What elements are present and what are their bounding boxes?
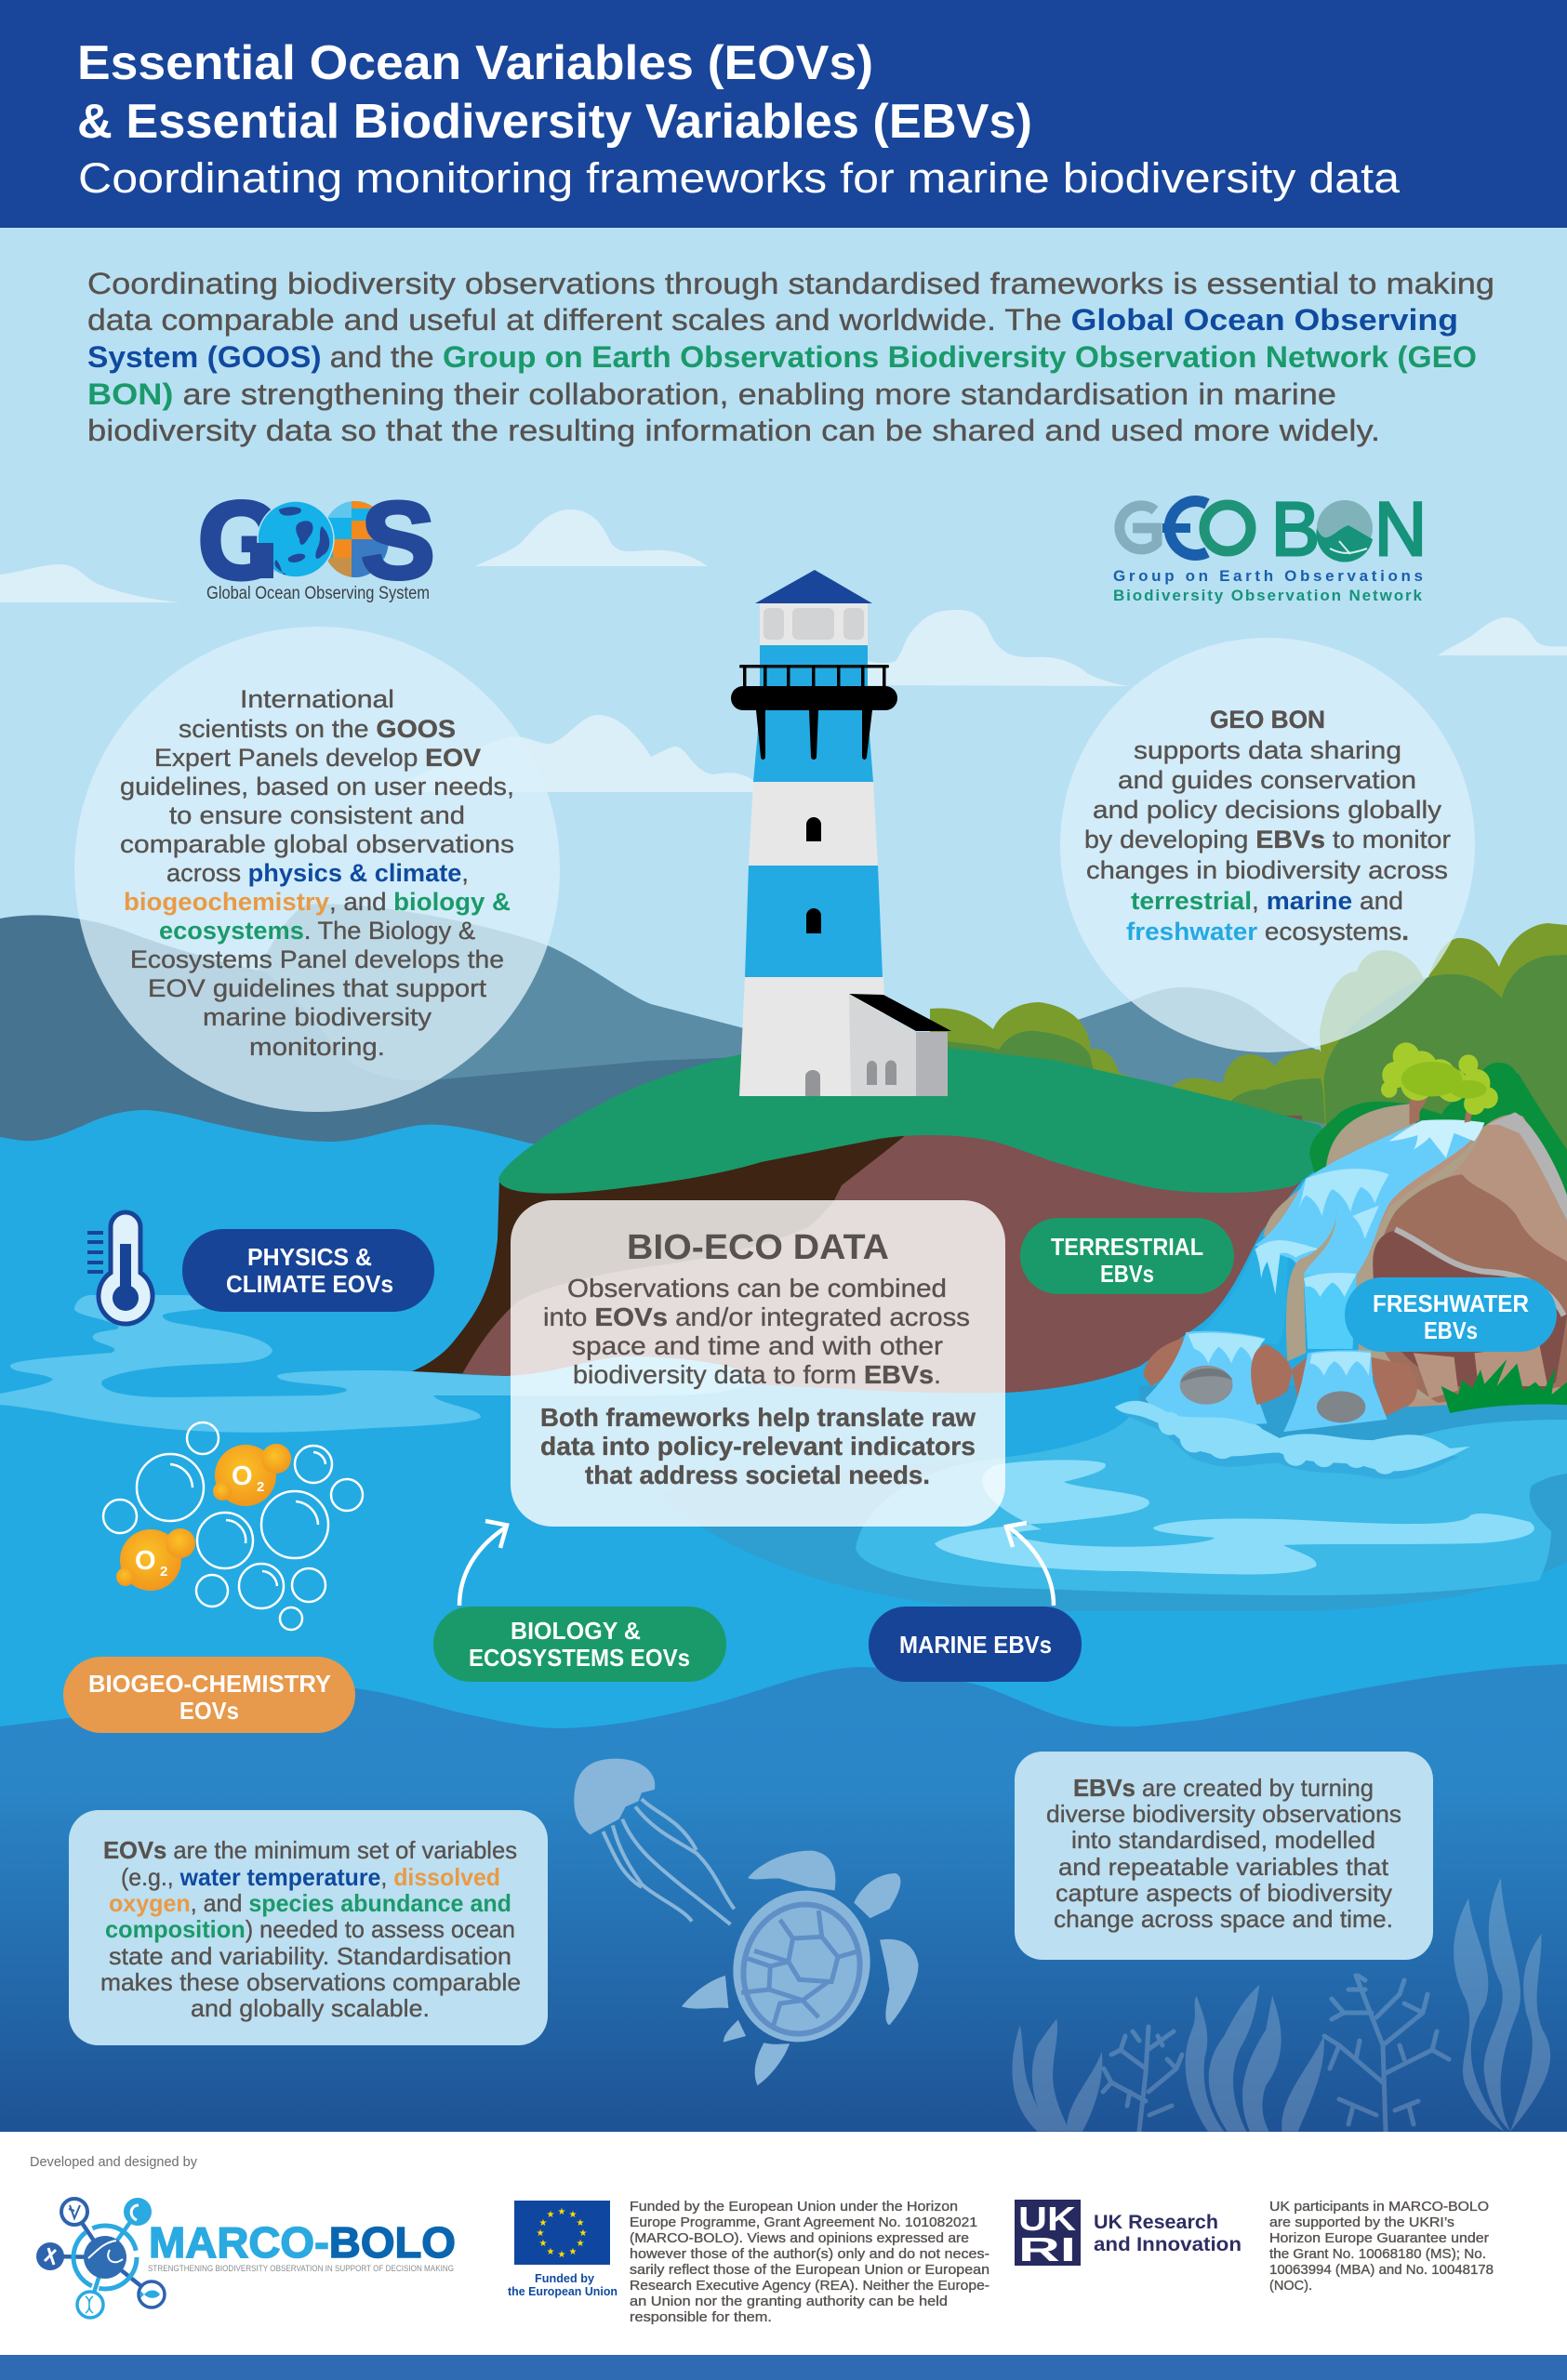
ocean patch right of box (1007, 1367, 1139, 1457)
logo: UK Research and Innovation: and Innovation (1094, 2234, 1242, 2255)
pill: biogeochemistry EOVs (63, 1657, 355, 1733)
UK funding statement: the Grant No. 10068180 (MS); No. (1269, 2246, 1486, 2262)
funding statement: (MARCO-BOLO). Views and opinions expressed are (630, 2230, 969, 2246)
logo: GOOS: G (198, 480, 284, 602)
right circle text: changes in biodiversity across (1086, 856, 1448, 884)
funding statement: however those of the author(s) only and do not neces- (630, 2246, 989, 2262)
right circle text: terrestrial, marine and (1131, 887, 1403, 915)
panel: EBV definition: diverse biodiversity observations (1046, 1800, 1401, 1828)
UK funding statement: (NOC). (1269, 2278, 1312, 2294)
logo: European Union: ★ (569, 2210, 578, 2220)
funding statement (630, 2199, 989, 2325)
pill: freshwater EBVs (1345, 1277, 1557, 1352)
mountains left (0, 904, 763, 1171)
lagoon highlights (935, 1460, 1534, 1575)
logo: European Union: ★ (539, 2218, 548, 2228)
panel: bio-eco data: that address societal needs. (585, 1461, 930, 1489)
intro paragraph: BON) are strengthening their collaboration, enabling more standardisation in marine (87, 377, 1336, 411)
panel: EBV definition: and repeatable variables that (1058, 1853, 1389, 1881)
sky background (0, 223, 1567, 1153)
left info circle (74, 627, 560, 1112)
funding statement: sarily reflect those of the European Union or European (630, 2262, 989, 2278)
oxygen bubbles icon: O (232, 1461, 253, 1491)
island cliff (412, 1130, 930, 1385)
logo: European Union: ★ (577, 2239, 585, 2249)
panel: bio-eco data: biodiversity data to form EBVs. (573, 1360, 941, 1389)
arrow: marine to data box (1006, 1523, 1054, 1606)
right circle text: and policy decisions globally (1093, 796, 1442, 824)
oxygen bubbles icon: 2 (257, 1479, 264, 1495)
logo: European Union: ★ (547, 2247, 555, 2257)
left circle text: across physics & climate, (166, 859, 469, 887)
logo: European Union: Funded by (535, 2271, 595, 2285)
logo: European Union: ★ (558, 2250, 566, 2260)
clouds (0, 509, 1567, 792)
panel: bio-eco data: BIO-ECO DATA (627, 1228, 889, 1267)
ocean (0, 1110, 1567, 1729)
panel: bio-eco data: data into policy-relevant indicators (540, 1432, 976, 1461)
logo: European Union: ★ (569, 2247, 578, 2257)
title: Coordinating monitoring frameworks for marine biodiversity data (78, 154, 1401, 202)
lagoon (856, 1411, 1567, 1595)
panel: EOV definition: composition) needed to assess ocean (105, 1915, 515, 1943)
UK funding statement: are supported by the UKRI’s (1269, 2215, 1454, 2230)
logo: European Union: ★ (579, 2228, 588, 2239)
left circle text: guidelines, based on user needs, (120, 773, 514, 800)
panel: EOV definition: (e.g., water temperature, dissolved (121, 1863, 500, 1891)
right circle text: GEO BON (1210, 706, 1325, 734)
intro paragraph (87, 267, 1494, 447)
intro paragraph: biodiversity data so that the resulting information can be shared and used more widely. (87, 414, 1380, 447)
panel: EBV definition: capture aspects of biodiversity (1056, 1879, 1392, 1907)
pill: physics and climate EOVs: CLIMATE EOVs (226, 1270, 393, 1298)
logo: European Union: ★ (558, 2207, 566, 2217)
panel: EBV definition: into standardised, modelled (1071, 1826, 1375, 1854)
logo: UK Research and Innovation (1015, 2200, 1242, 2268)
right info circle (1060, 638, 1475, 1052)
oxygen bubbles icon: O (135, 1546, 156, 1576)
logo: European Union: the European Union (508, 2284, 618, 2298)
panel: EOV definition: and globally scalable. (191, 1994, 430, 2022)
intro paragraph: Coordinating biodiversity observations through standardised frameworks is essential to making (87, 267, 1494, 300)
logo: MARCO-BOLO: STRENGTHENING BIODIVERSITY OBSERVATION IN SUPPORT OF DECISION MAKING (148, 2264, 454, 2274)
UK funding statement (1269, 2199, 1494, 2294)
logo: GOOS (200, 499, 433, 602)
deep water (0, 1664, 1567, 2132)
logo: MARCO-BOLO: MARCO-BOLO (149, 2218, 456, 2267)
surface waves left (0, 1295, 752, 1433)
funding statement: Research Executive Agency (REA). Neither the Europe- (630, 2278, 989, 2294)
oxygen bubbles icon: 2 (160, 1564, 167, 1580)
panel: EBV definition: change across space and time. (1054, 1905, 1393, 1933)
logo: UK Research and Innovation: UK (1018, 2200, 1076, 2238)
panel: bio-eco data: space and time and with other (572, 1331, 943, 1360)
left circle text: biogeochemistry, and biology & (124, 888, 511, 916)
right circle text: freshwater ecosystems. (1126, 918, 1409, 945)
thermometer icon (87, 1212, 153, 1324)
funding statement: responsible for them. (630, 2309, 772, 2325)
funding statement: Europe Programme, Grant Agreement No. 101082021 (630, 2215, 977, 2230)
title: & Essential Biodiversity Variables (EBVs) (77, 95, 1032, 149)
title (77, 36, 1401, 202)
panel: bio-eco data: Both frameworks help translate raw (540, 1403, 976, 1432)
logo: European Union: ★ (547, 2210, 555, 2220)
lighthouse (731, 570, 951, 1096)
logo: GEO BON: B (1271, 487, 1320, 572)
intro paragraph: System (GOOS) and the Group on Earth Observations Biodiversity Observation Network (GEO (87, 340, 1477, 374)
pill: terrestrial EBVs: TERRESTRIAL (1051, 1233, 1203, 1261)
UK funding statement: 10063994 (MBA) and No. 10048178 (1269, 2262, 1494, 2278)
logo: European Union (508, 2201, 618, 2298)
intro paragraph: data comparable and useful at different scales and worldwide. The Global Ocean Observing (87, 303, 1458, 337)
logo: GEO BON: Group on Earth Observations (1113, 567, 1423, 585)
left circle text: to ensure consistent and (169, 801, 465, 829)
seaweed and corals (1012, 1878, 1550, 2132)
left circle text: Ecosystems Panel develops the (130, 945, 504, 973)
footer background (0, 2132, 1567, 2356)
island grass (498, 1043, 1339, 1194)
panel: EOV definition: state and variability. Standardisation (109, 1942, 511, 1970)
right circle text: by developing EBVs to monitor (1084, 826, 1451, 853)
funding statement: Funded by the European Union under the Horizon (630, 2199, 958, 2215)
funding statement: an Union nor the granting authority can be held (630, 2294, 948, 2309)
waterfall and rocks (1115, 1042, 1567, 1479)
arrow: biology to data box (459, 1521, 507, 1606)
right circle text (1084, 706, 1451, 945)
bottom band (0, 2355, 1567, 2380)
left circle text: marine biodiversity (203, 1003, 432, 1031)
pill: terrestrial EBVs (1020, 1218, 1234, 1294)
pill: biogeochemistry EOVs: BIOGEO-CHEMISTRY (88, 1670, 331, 1698)
pill: physics and climate EOVs: PHYSICS & (247, 1243, 372, 1271)
pill: freshwater EBVs: FRESHWATER (1373, 1289, 1529, 1317)
pill: physics and climate EOVs (182, 1229, 434, 1312)
oxygen bubbles icon (103, 1422, 363, 1630)
logo: MARCO-BOLO (36, 2198, 456, 2318)
panel: bio-eco data (511, 1200, 1005, 1527)
panel: EBV definition (1015, 1752, 1433, 1960)
foliage right (930, 923, 1567, 1209)
panel: EOV definition: makes these observations comparable (100, 1968, 521, 1996)
panel: EOV definition: oxygen, and species abundance and (109, 1889, 511, 1917)
logo: UK Research and Innovation: UK Research (1094, 2212, 1218, 2233)
lagoon shadow (657, 1385, 1567, 1611)
title: Essential Ocean Variables (EOVs) (77, 36, 873, 90)
panel: bio-eco data: Observations can be combined (567, 1274, 947, 1302)
logo: UK Research and Innovation: RI (1018, 2230, 1076, 2268)
logo: European Union: ★ (537, 2228, 545, 2239)
logo: GEO BON: N (1374, 487, 1427, 572)
pill: marine EBVs (869, 1606, 1082, 1682)
pill: biology and ecosystems EOVs: BIOLOGY & (511, 1617, 641, 1645)
left circle text: comparable global observations (120, 830, 514, 858)
logo: GOOS: Global Ocean Observing System (206, 584, 430, 603)
sea creatures (574, 1759, 919, 2085)
island soil (462, 1116, 1302, 1393)
developed by label: Developed and designed by (30, 2155, 198, 2170)
panel: bio-eco data: into EOVs and/or integrated across (543, 1302, 970, 1331)
pill: marine EBVs: MARINE EBVs (899, 1631, 1052, 1659)
pill: terrestrial EBVs: EBVs (1100, 1260, 1154, 1288)
header banner (0, 0, 1567, 228)
left circle text: EOV guidelines that support (148, 974, 487, 1002)
left circle text: Expert Panels develop EOV (154, 744, 481, 772)
panel: EBV definition: EBVs are created by turning (1073, 1774, 1374, 1802)
mountain right (1069, 987, 1339, 1134)
logo: GEO BON: Biodiversity Observation Network (1113, 587, 1423, 604)
pill: freshwater EBVs: EBVs (1424, 1316, 1478, 1344)
left circle text: International (240, 685, 394, 713)
pill: biology and ecosystems EOVs: ECOSYSTEMS EOVs (469, 1644, 690, 1672)
pill: biology and ecosystems EOVs (433, 1606, 726, 1682)
logo: GEO BON (1113, 487, 1427, 604)
logo: European Union: ★ (539, 2239, 548, 2249)
logo: GOOS: S (361, 480, 435, 602)
left circle text: monitoring. (249, 1033, 385, 1061)
right circle text: and guides conservation (1118, 766, 1416, 794)
left circle text (120, 685, 514, 1061)
panel: EOV definition: EOVs are the minimum set of variables (103, 1836, 517, 1864)
logo: European Union: ★ (577, 2218, 585, 2228)
left circle text: scientists on the GOOS (179, 715, 456, 743)
pill: biogeochemistry EOVs: EOVs (179, 1697, 239, 1725)
UK funding statement: Horizon Europe Guarantee under (1269, 2230, 1489, 2246)
panel: EOV definition (69, 1810, 548, 2045)
right circle text: supports data sharing (1134, 736, 1401, 764)
UK funding statement: UK participants in MARCO-BOLO (1269, 2199, 1489, 2215)
left circle text: ecosystems. The Biology & (159, 917, 475, 945)
